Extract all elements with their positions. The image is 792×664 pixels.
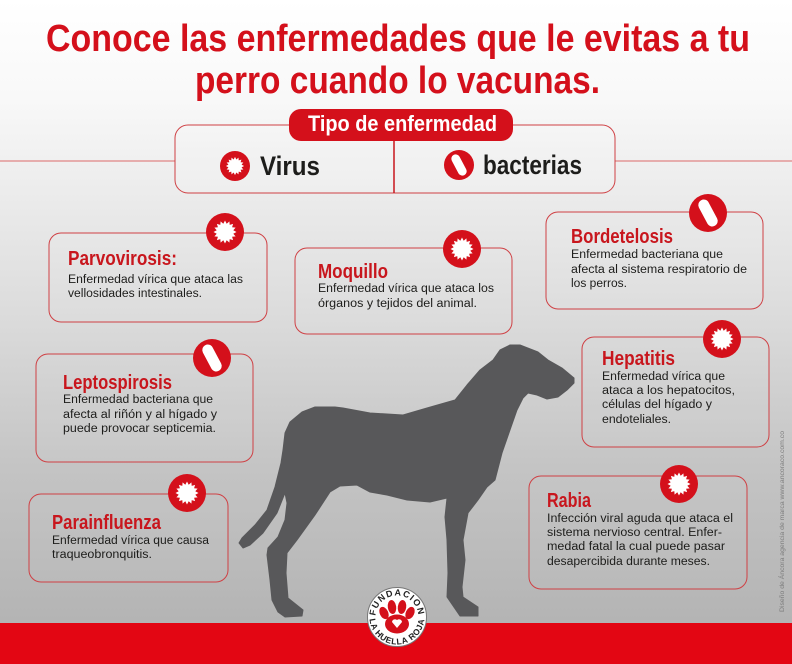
heading: bordetelosis: Bordetelosis (571, 226, 673, 248)
heading: hepatitis: Hepatitis (602, 348, 675, 370)
text: parvovirosis description (68, 274, 243, 300)
icon: bacteria (689, 194, 727, 232)
heading: rabia: Rabia (547, 490, 592, 512)
text: parainfluenza description: Enfermedad vírica que causa (52, 535, 210, 547)
panel: rabia (529, 465, 747, 589)
legend label: virus: Virus (260, 151, 320, 181)
text: parainfluenza description (52, 535, 210, 561)
text: leptospirosis description: afecta al riñón y al hígado y (63, 409, 217, 421)
text: parvovirosis description: Enfermedad vírica que ataca las (68, 274, 243, 286)
icon: bacteria legend (444, 150, 474, 180)
icon: virus (206, 213, 244, 251)
icon: bacteria (193, 339, 231, 377)
legend heading pill: Tipo de enfermedad (308, 111, 497, 136)
text: parvovirosis description: vellosidades intestinales. (68, 288, 202, 300)
red footer band (0, 623, 792, 664)
text: bordetelosis description: Enfermedad bacteriana que (571, 249, 723, 261)
logo: fundación la huella roja: LA HUELLA ROJA (370, 618, 424, 645)
icon: virus (660, 465, 698, 503)
text: rabia description: medad fatal la cual puede pasar (547, 541, 725, 553)
heading: parainfluenza: Parainfluenza (52, 512, 162, 534)
text: moquillo description (318, 283, 494, 310)
text: bordetelosis description (571, 249, 747, 290)
text: rabia description: desapercibida durante meses. (547, 556, 710, 568)
logo: fundación la huella roja (367, 587, 427, 647)
logo: fundación la huella roja: FUNDACION (369, 589, 424, 616)
text: moquillo description: órganos y tejidos del animal. (318, 298, 477, 310)
text: hepatitis description: Enfermedad vírica que (602, 371, 725, 383)
text: rabia description: sistema nervioso central. Enfer- (547, 527, 722, 539)
text: rabia description: Infección viral aguda que ataca el (547, 513, 733, 525)
heading: moquillo: Moquillo (318, 261, 388, 283)
dog silhouette (239, 345, 574, 617)
heading: parvovirosis: Parvovirosis: (68, 248, 177, 270)
text: leptospirosis description: Enfermedad bacteriana que (63, 394, 213, 406)
text: rabia description (547, 513, 733, 568)
text: hepatitis description (602, 371, 735, 426)
legend label: bacterias: bacterias (483, 150, 582, 180)
panel: bordetelosis (546, 194, 763, 309)
icon: virus (443, 230, 481, 268)
text: hepatitis description: endoteliales. (602, 414, 671, 426)
credit text: Diseño de Áncora agencia de marca www.ancoraco.com.co (777, 431, 786, 612)
icon: virus (168, 474, 206, 512)
icon: virus legend (220, 151, 250, 181)
panel: leptospirosis (36, 339, 253, 462)
panel: parvovirosis (49, 213, 267, 322)
text: parainfluenza description: traqueobronquitis. (52, 549, 152, 561)
text: leptospirosis description: puede provocar septicemia. (63, 423, 216, 435)
heading: leptospirosis: Leptospirosis (63, 372, 172, 394)
text: moquillo description: Enfermedad vírica que ataca los (318, 283, 494, 295)
text: hepatitis description: ataca a los hepatocitos, (602, 385, 735, 397)
title (46, 18, 750, 102)
text: bordetelosis description: los perros. (571, 278, 627, 290)
panel: parainfluenza (29, 474, 228, 582)
panel: moquillo (295, 230, 512, 334)
text: leptospirosis description (63, 394, 217, 435)
icon: paw (377, 599, 417, 634)
title: perro cuando lo vacunas. (195, 60, 600, 102)
panel: hepatitis (582, 320, 769, 447)
legend: tipo de enfermedad (0, 109, 792, 193)
text: bordetelosis description: afecta al sistema respiratorio de (571, 264, 747, 276)
text: hepatitis description: células del hígado y (602, 399, 712, 411)
icon: virus (703, 320, 741, 358)
